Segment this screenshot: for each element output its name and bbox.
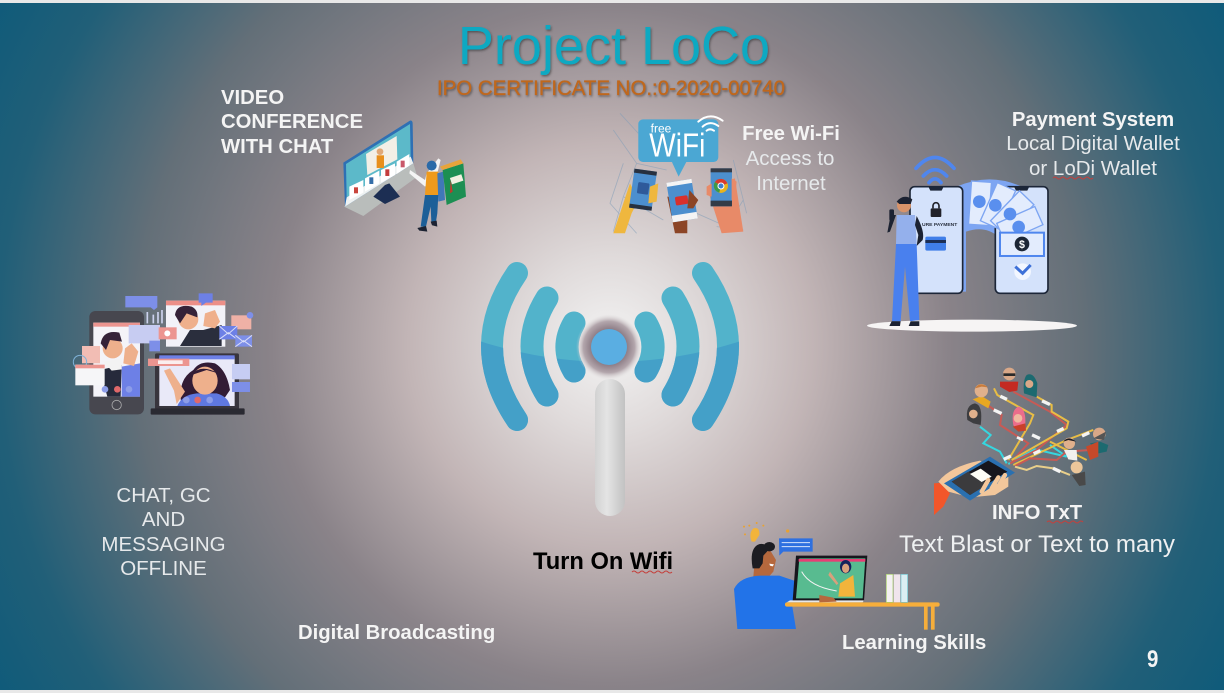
icon: free wifi bbox=[610, 113, 747, 233]
title: Project LoCo bbox=[458, 16, 770, 76]
label: free wifi bbox=[742, 123, 840, 195]
icon: free wifi: WiFi bbox=[649, 128, 705, 165]
label: payment system bbox=[1006, 109, 1180, 180]
label: chat and messaging: MESSAGING bbox=[101, 533, 226, 556]
label: free wifi: Access to bbox=[746, 147, 834, 170]
label: video conference: CONFERENCE bbox=[221, 111, 363, 133]
label: chat and messaging bbox=[101, 484, 226, 580]
label: chat and messaging: AND bbox=[142, 508, 185, 531]
icon: learning skills bbox=[734, 522, 940, 630]
label: info text: Text Blast or Text to many bbox=[899, 531, 1176, 558]
label: free wifi: Free Wi-Fi bbox=[742, 123, 840, 145]
label: video conference: WITH CHAT bbox=[221, 136, 334, 158]
icon: payment system: $ bbox=[1019, 239, 1025, 251]
label: info text bbox=[899, 502, 1176, 558]
label: chat and messaging: OFFLINE bbox=[120, 557, 207, 580]
label: free wifi: Internet bbox=[756, 172, 826, 195]
label: video conference bbox=[221, 87, 363, 158]
label: chat and messaging: CHAT, GC bbox=[116, 484, 211, 507]
label: digital broadcasting: Digital Broadcasting bbox=[298, 622, 495, 644]
icon: free wifi: free bbox=[651, 122, 672, 136]
label: payment system: Local Digital Wallet bbox=[1006, 132, 1180, 155]
page number: 9 bbox=[1147, 645, 1158, 672]
subtitle: certificate number: IPO CERTIFICATE NO.:0-2020-00740 bbox=[437, 77, 785, 100]
icon: central wifi antenna bbox=[492, 273, 728, 516]
icon: payment system bbox=[867, 157, 1077, 332]
label: payment system: Payment System bbox=[1012, 109, 1174, 131]
label: payment system: or LoDi Wallet bbox=[1029, 157, 1157, 180]
label: info text: INFO TxT bbox=[992, 502, 1083, 524]
icon: video conference bbox=[343, 121, 466, 232]
icon: chat and messaging bbox=[73, 293, 253, 415]
label: video conference: VIDEO bbox=[221, 87, 284, 109]
label: turn on wifi: Turn On Wifi bbox=[533, 549, 673, 575]
icon: payment system: URE PAYMENT bbox=[922, 222, 958, 227]
label: learning skills: Learning Skills bbox=[842, 632, 986, 654]
icon: info text network bbox=[934, 368, 1108, 515]
